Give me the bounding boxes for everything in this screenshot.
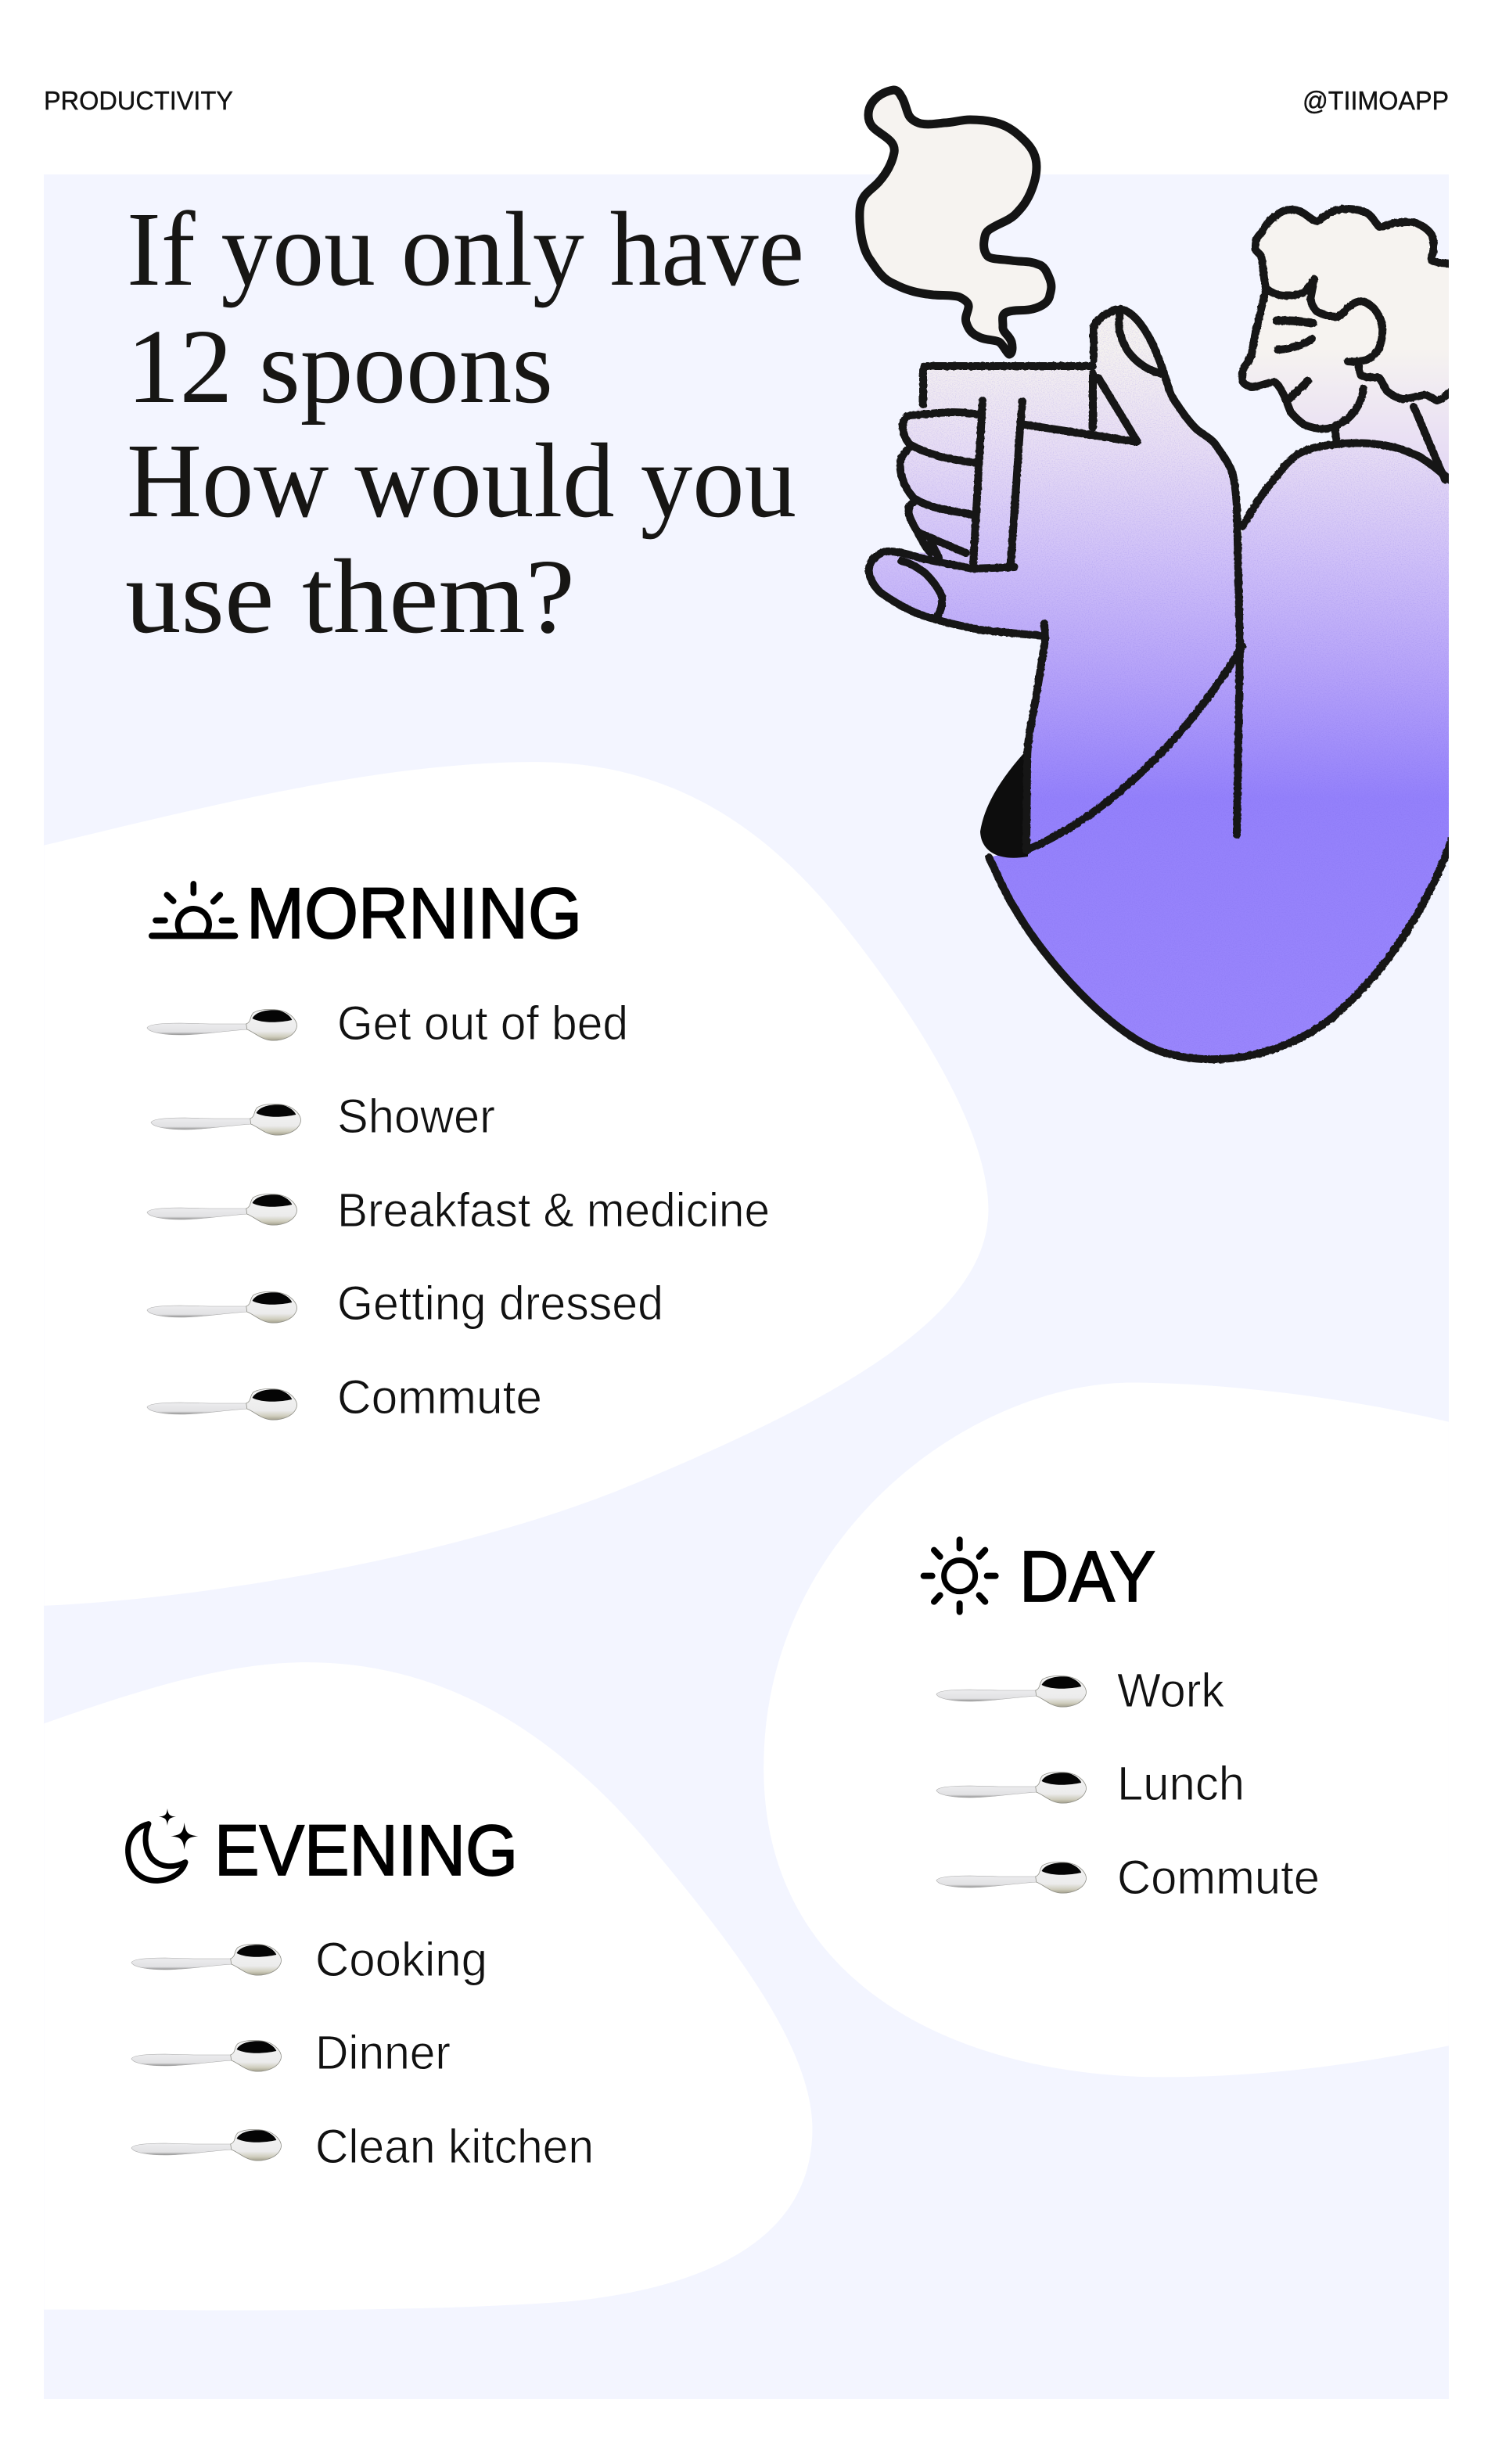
item: commute: Commute — [1117, 1851, 1320, 1904]
illustration: person with steaming cup — [860, 90, 1451, 1059]
item: getting dressed — [147, 1277, 663, 1330]
blob: day background — [764, 1383, 1449, 2077]
title: 12 spoons — [127, 308, 553, 426]
hand and body fills — [869, 309, 1451, 1059]
item: breakfast and medicine: Breakfast & medicine — [337, 1184, 770, 1237]
item: dinner — [131, 2026, 451, 2079]
heading: morning: MORNING — [246, 874, 582, 954]
head fill — [1242, 209, 1451, 485]
illustration outlines — [869, 209, 1451, 1059]
heading: evening: EVENING — [214, 1811, 518, 1891]
item: breakfast and medicine — [147, 1184, 770, 1237]
item: get out of bed: Get out of bed — [337, 997, 628, 1050]
item: work: Work — [1117, 1664, 1224, 1717]
item: cooking: Cooking — [315, 1933, 487, 1986]
item: work — [936, 1664, 1224, 1717]
blob: evening background — [44, 1662, 812, 2310]
icon: moon and stars — [128, 1808, 198, 1880]
item: commute: Commute — [337, 1370, 542, 1424]
item: clean kitchen: Clean kitchen — [315, 2120, 594, 2173]
item: lunch — [936, 1757, 1245, 1810]
icon: sun — [924, 1539, 996, 1612]
item: getting dressed: Getting dressed — [337, 1277, 663, 1330]
title: How would you — [127, 422, 796, 540]
heading: day: DAY — [1019, 1537, 1155, 1617]
section: day — [924, 1537, 1320, 1904]
item: cooking — [131, 1933, 487, 1986]
section: morning — [147, 874, 770, 1424]
item: commute — [147, 1370, 542, 1424]
title: If you only have — [127, 191, 804, 308]
item: shower — [151, 1090, 495, 1143]
title — [125, 191, 804, 656]
item: dinner: Dinner — [315, 2026, 451, 2079]
smoke — [860, 90, 1051, 354]
icon: sunrise — [149, 884, 238, 939]
dark sleeve — [980, 749, 1028, 858]
item: shower: Shower — [337, 1090, 495, 1143]
blob: morning background — [44, 762, 988, 1606]
item: get out of bed — [147, 997, 628, 1050]
item: commute — [936, 1851, 1320, 1904]
header label: handle: @TIIMOAPP — [1303, 86, 1449, 115]
item: lunch: Lunch — [1117, 1757, 1245, 1810]
item: clean kitchen — [131, 2120, 594, 2173]
title: use them? — [125, 538, 575, 656]
section: evening — [128, 1808, 594, 2173]
header label: productivity: PRODUCTIVITY — [44, 86, 233, 115]
